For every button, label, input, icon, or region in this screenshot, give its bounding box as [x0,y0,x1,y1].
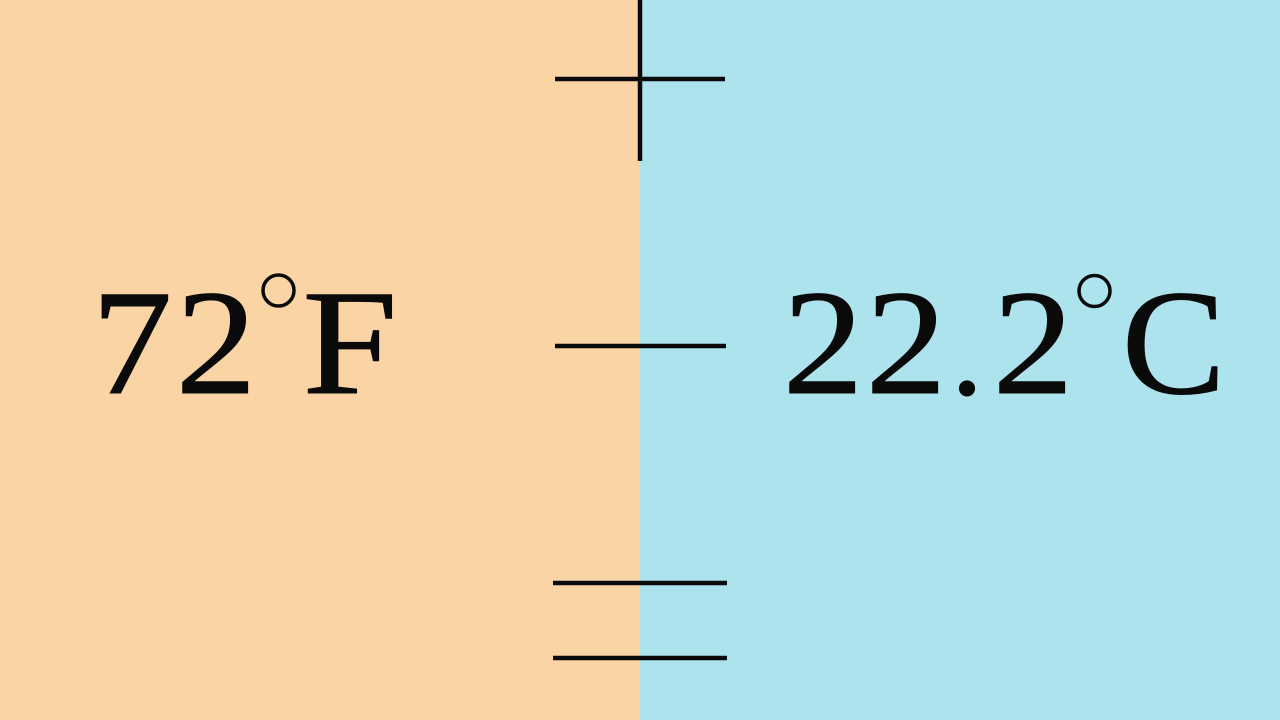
fahrenheit value: F [302,259,398,426]
celsius value: 2 [783,259,863,426]
minus symbol [555,344,726,348]
fahrenheit value: 2 [176,259,256,426]
celsius value [783,259,1226,426]
fahrenheit value: 7 [92,259,172,426]
panel: fahrenheit side [0,0,640,720]
celsius value: 2 [866,259,946,426]
equals symbol [553,583,727,658]
celsius value: C [1122,260,1226,426]
plus symbol [555,0,725,161]
fahrenheit value [92,259,398,426]
panel: celsius side [640,0,1280,720]
celsius value: . [951,280,983,422]
celsius value: 2 [993,259,1073,426]
